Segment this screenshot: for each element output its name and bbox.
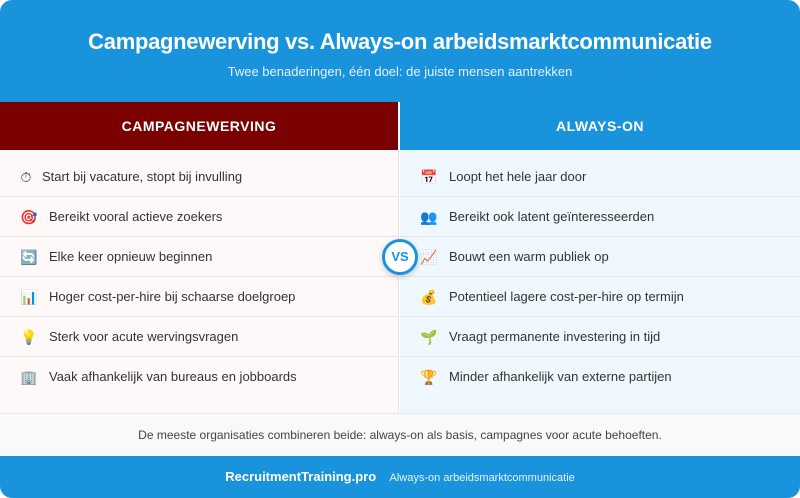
item: externe partijen: 🏆 (420, 369, 438, 385)
item: investering (400, 317, 800, 357)
footer: RecruitmentTraining.pro Always-on arbeidsmarktcommunicatie (225, 469, 575, 484)
item: opnieuw beginnen: 🔄 (20, 249, 38, 265)
item: lagere cost-per-hire: Potentieel lagere cost-per-hire op termijn (449, 289, 684, 304)
item: externe partijen: Minder afhankelijk van externe partijen (449, 369, 672, 384)
item: latent: Bereikt ook latent geïnteresseerden (449, 209, 654, 224)
item: investering: Vraagt permanente investering in tijd (449, 329, 660, 344)
item: lagere cost-per-hire (400, 277, 800, 317)
item: acute wervingsvragen (0, 317, 398, 357)
item: hele jaar: 📅 (420, 169, 438, 185)
vs badge (382, 239, 418, 275)
item: start bij vacature: ⏱ (21, 169, 31, 185)
item: cost-per-hire: 📊 (20, 289, 38, 305)
column header: always-on (400, 102, 800, 150)
item: opnieuw beginnen (0, 237, 398, 277)
conclusion note: De meeste organisaties combineren beide: always-on als basis, campagnes voor acute behoeften. (138, 428, 662, 442)
item: latent (400, 197, 800, 237)
item: opnieuw beginnen: Elke keer opnieuw beginnen (49, 249, 212, 264)
item: acute wervingsvragen: 💡 (20, 329, 38, 345)
conclusion note (0, 413, 800, 456)
title: Campagnewerving vs. Always-on arbeidsmarktcommunicatie (88, 29, 712, 54)
vs badge: VS (391, 249, 409, 264)
footer (0, 456, 800, 498)
item: actieve zoekers: Bereikt vooral actieve zoekers (49, 209, 222, 224)
panel: always-on list (400, 150, 800, 413)
item: actieve zoekers (0, 197, 398, 237)
item: warm publiek: Bouwt een warm publiek op (449, 249, 609, 264)
item: warm publiek (400, 237, 800, 277)
panel: campagnewerving list (0, 150, 399, 413)
item: start bij vacature (0, 157, 398, 197)
item: bureaus: 🏢 (20, 369, 38, 385)
item: actieve zoekers: 🎯 (20, 209, 38, 225)
subtitle: Twee benaderingen, één doel: de juiste mensen aantrekken (228, 64, 572, 79)
item: bureaus: Vaak afhankelijk van bureaus en jobboards (49, 369, 297, 384)
item: start bij vacature: Start bij vacature, stopt bij invulling (42, 169, 242, 184)
column header: campagnewerving: CAMPAGNEWERVING (122, 118, 276, 134)
item: cost-per-hire: Hoger cost-per-hire bij schaarse doelgroep (49, 289, 295, 304)
item: hele jaar (400, 157, 800, 197)
item: latent: 👥 (420, 209, 438, 225)
item: warm publiek: 📈 (420, 249, 438, 265)
item: acute wervingsvragen: Sterk voor acute wervingsvragen (49, 329, 238, 344)
item: cost-per-hire (0, 277, 398, 317)
column header: always-on: ALWAYS-ON (556, 118, 644, 134)
column header: campagnewerving (0, 102, 398, 150)
item: hele jaar: Loopt het hele jaar door (449, 169, 586, 184)
header (0, 0, 800, 102)
item: investering: 🌱 (420, 329, 438, 345)
item: lagere cost-per-hire: 💰 (420, 289, 438, 305)
